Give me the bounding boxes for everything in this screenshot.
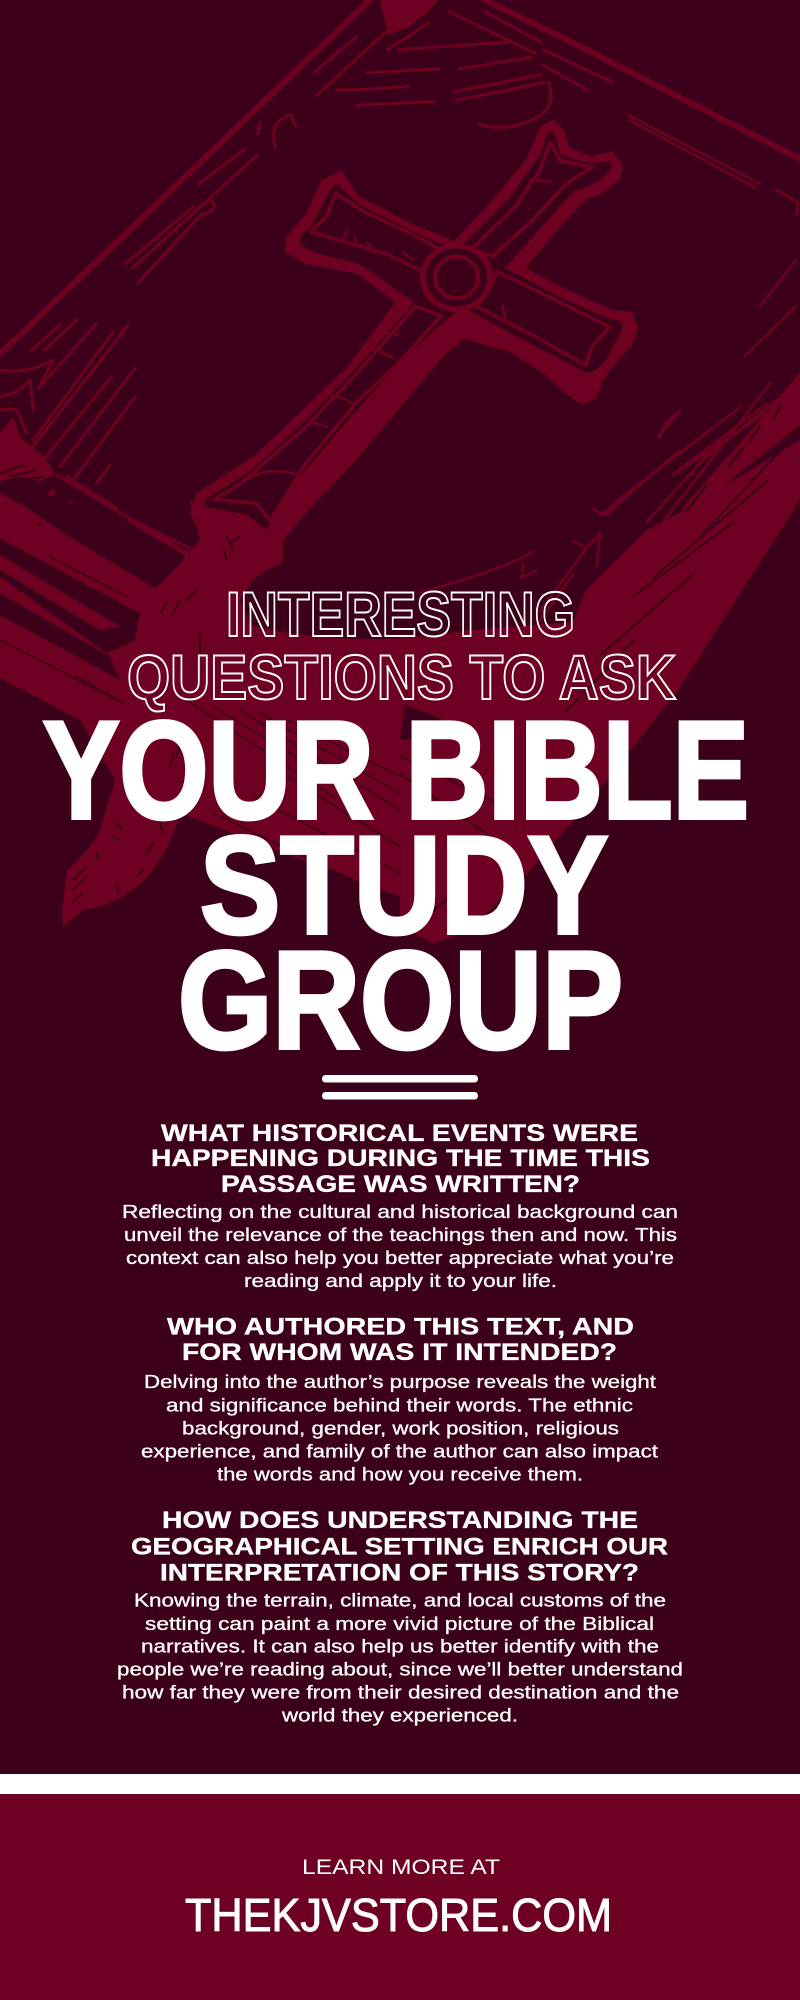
section 3 body: narratives. It can also help us better identify with the <box>141 1637 659 1657</box>
section 1 heading: HAPPENING DURING THE TIME THIS <box>151 1145 650 1172</box>
section 3 heading: HOW DOES UNDERSTANDING THE <box>162 1507 638 1534</box>
section 1 <box>122 1120 678 1291</box>
section 3 heading <box>131 1507 668 1587</box>
section 2 body: background, gender, work position, religious <box>182 1418 619 1438</box>
section 2 body: and significance behind their words. The ethnic <box>166 1396 633 1416</box>
title bold line 2: STUDY <box>200 808 608 963</box>
section 3 body: world they experienced. <box>281 1706 518 1726</box>
section 2 body: Delving into the author’s purpose reveals the weight <box>144 1372 656 1392</box>
footer label: LEARN MORE AT <box>302 1856 500 1879</box>
page streaks <box>0 482 400 903</box>
pages and ribbon bands <box>0 372 800 944</box>
section 2 body: experience, and family of the author can also impact <box>141 1442 658 1462</box>
illustration: bible with cross <box>0 0 800 944</box>
section 2 heading: FOR WHOM WAS IT INTENDED? <box>182 1339 617 1366</box>
section 3 body <box>117 1591 683 1726</box>
section 3 <box>117 1507 683 1726</box>
right page streaks <box>400 400 793 911</box>
section 1 heading: WHAT HISTORICAL EVENTS WERE <box>161 1120 638 1147</box>
section 1 heading <box>151 1120 650 1198</box>
section 3 body: Knowing the terrain, climate, and local customs of the <box>134 1591 666 1611</box>
section 2 <box>141 1314 658 1484</box>
section 3 heading: INTERPRETATION OF THIS STORY? <box>160 1560 639 1587</box>
white band <box>0 1774 800 1794</box>
section 1 body: context can also help you better appreciate what you’re <box>126 1248 674 1268</box>
left book corner <box>0 320 207 580</box>
section 1 body <box>122 1202 678 1291</box>
section 1 body: reading and apply it to your life. <box>244 1271 557 1291</box>
section 2 body: the words and how you receive them. <box>217 1464 583 1484</box>
section 3 body: how far they were from their desired destination and the <box>122 1683 679 1703</box>
title bold line 3: GROUP <box>178 923 623 1078</box>
cross <box>190 119 638 568</box>
title outline line 1: INTERESTING <box>226 580 575 650</box>
title block <box>43 580 749 1078</box>
divider bars <box>322 1075 478 1100</box>
section 1 body: Reflecting on the cultural and historical background can <box>122 1202 678 1222</box>
section 3 heading: GEOGRAPHICAL SETTING ENRICH OUR <box>131 1533 668 1560</box>
section 2 heading <box>167 1314 634 1366</box>
section 3 body: people we’re reading about, since we’ll better understand <box>117 1660 683 1680</box>
title outline line 2: QUESTIONS TO ASK <box>127 643 676 713</box>
section 1 heading: PASSAGE WAS WRITTEN? <box>221 1171 580 1198</box>
section 1 body: unveil the relevance of the teachings then and now. This <box>124 1225 677 1245</box>
section 3 body: setting can paint a more vivid picture of the Biblical <box>145 1614 654 1634</box>
footer url: THEKJVSTORE.COM <box>185 1889 612 1941</box>
book cover edges and top corner <box>0 0 800 528</box>
footer panel <box>0 1794 800 2000</box>
section 2 heading: WHO AUTHORED THIS TEXT, AND <box>167 1314 634 1340</box>
section 2 body <box>141 1372 658 1484</box>
